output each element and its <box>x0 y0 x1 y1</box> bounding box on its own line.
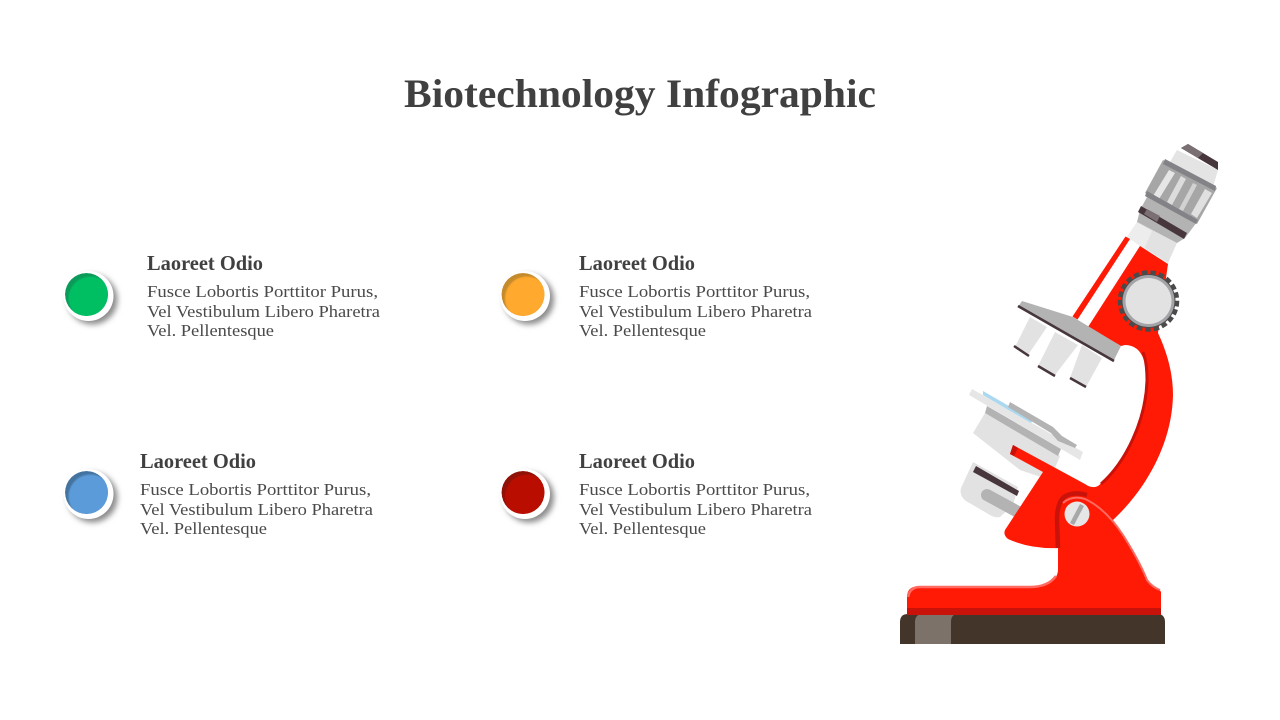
stage <box>969 389 1083 480</box>
red foot <box>907 493 1161 615</box>
objective lenses <box>1014 317 1102 387</box>
icon: green dot <box>64 271 118 324</box>
base plate <box>900 614 1165 644</box>
heading: Laoreet Odio <box>579 449 695 473</box>
heading: Laoreet Odio <box>140 449 256 473</box>
screw <box>1064 502 1090 526</box>
red arm <box>1004 246 1173 560</box>
text block <box>147 282 380 340</box>
item: blue <box>64 449 373 538</box>
objective turret <box>1018 301 1121 362</box>
condenser <box>961 462 1020 517</box>
tube white stripe <box>1077 239 1140 327</box>
focus knob <box>1120 272 1177 330</box>
item: green <box>64 251 380 340</box>
text block: Vel. Pellentesque <box>579 321 706 340</box>
microscope <box>900 144 1218 644</box>
stage arm edge <box>1010 445 1018 456</box>
text block: Vel. Pellentesque <box>147 321 274 340</box>
text block: Fusce Lobortis Porttitor Purus, <box>140 480 371 499</box>
text block <box>579 282 812 340</box>
item: red <box>500 449 812 538</box>
icon: blue dot <box>64 469 118 522</box>
arm inner shadow <box>1101 352 1147 484</box>
heading: Laoreet Odio <box>579 251 695 275</box>
text block: Vel Vestibulum Libero Pharetra <box>579 500 812 519</box>
text block: Fusce Lobortis Porttitor Purus, <box>147 282 378 301</box>
red tube stripe <box>1072 236 1130 320</box>
text block: Fusce Lobortis Porttitor Purus, <box>579 480 810 499</box>
eyepiece <box>1127 144 1218 263</box>
icon: orange dot <box>500 271 554 324</box>
icon: red dot <box>500 469 554 522</box>
text block: Vel Vestibulum Libero Pharetra <box>579 302 812 321</box>
heading: Laoreet Odio <box>147 251 263 275</box>
text block <box>579 480 812 538</box>
text block: Vel Vestibulum Libero Pharetra <box>140 500 373 519</box>
item: orange <box>500 251 812 340</box>
title: Biotechnology Infographic <box>404 71 876 116</box>
text block <box>140 480 373 538</box>
text block: Fusce Lobortis Porttitor Purus, <box>579 282 810 301</box>
text block: Vel Vestibulum Libero Pharetra <box>147 302 380 321</box>
text block: Vel. Pellentesque <box>579 519 706 538</box>
text block: Vel. Pellentesque <box>140 519 267 538</box>
